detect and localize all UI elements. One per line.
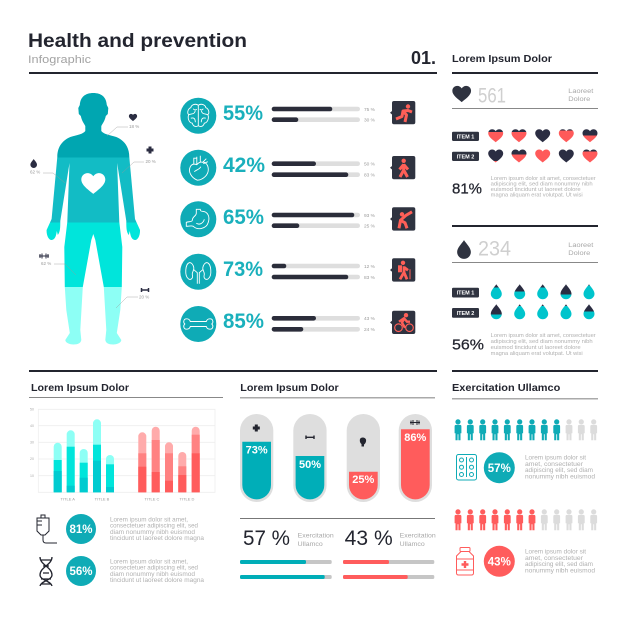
bars: 43 %	[364, 316, 376, 322]
bars: 83 %	[364, 275, 376, 281]
bars	[272, 316, 376, 333]
callout: heart 18%	[107, 114, 139, 136]
circle stat 43%: 43%	[488, 556, 511, 568]
percentage: 73%	[223, 258, 263, 281]
bar chart: TITLE D	[180, 497, 195, 502]
stat 57%: 57 %	[243, 527, 290, 550]
pictogram row: red	[455, 509, 597, 530]
text block: magna aliquam erat volutpat. Ut wisi	[491, 351, 583, 357]
callout: dumbbell 62%: 62 %	[41, 261, 51, 266]
label	[568, 242, 594, 257]
title: Health and prevention	[28, 31, 247, 52]
icon: runner	[390, 101, 415, 124]
bar chart: TITLE B	[95, 497, 110, 502]
icon: heart	[452, 86, 471, 102]
bar chart: 50	[30, 408, 34, 412]
cyan bars	[54, 419, 114, 492]
text block: tincidunt ut laoreet dolore magna	[110, 535, 205, 542]
callout: small dumbbell 20%: 20 %	[139, 294, 149, 300]
gauge 73%: 73%	[246, 444, 268, 456]
icon: IV bag	[37, 515, 57, 543]
text block: adipiscing elit, sed diam nonummy nibh	[491, 339, 593, 345]
text block: Lorem ipsum dolor sit amet, consectetuer	[491, 176, 596, 182]
callout: plus 20%: 20 %	[146, 159, 156, 164]
percentage: 85%	[223, 310, 264, 333]
bars: 12 %	[364, 264, 376, 270]
pictogram row: teal	[455, 419, 597, 440]
panel: heart stats	[452, 53, 598, 199]
heading: Exercitation Ullamco	[452, 382, 560, 394]
bars: 30 %	[364, 118, 376, 124]
circle stat 57%	[484, 452, 515, 483]
bars: 83 %	[364, 172, 376, 178]
icon: stomach	[180, 201, 216, 237]
row: heart 42%	[180, 150, 415, 186]
icon: brain	[180, 98, 216, 134]
text block: Lorem ipsum dolor sit amet,	[110, 516, 188, 524]
text block: tincidunt ut laoreet dolore magna	[110, 577, 205, 584]
item badges	[452, 288, 479, 318]
panel: bar chart section	[29, 382, 223, 586]
circle stat 81%	[66, 514, 96, 544]
text block: adipiscing elit, sed diam	[525, 561, 593, 568]
callout: drop 62%	[30, 159, 65, 183]
subtitle: Infographic	[28, 54, 92, 66]
gauge 86%: 86%	[404, 432, 427, 444]
stat 43%: 43 %	[345, 527, 393, 550]
heading: Lorem Ipsum Dolor	[240, 382, 339, 394]
panel: people pictograms	[452, 382, 598, 577]
big number: 561	[478, 84, 506, 107]
text block: Lorem ipsum dolor sit amet, consectetuer	[491, 333, 596, 339]
bars: 25 %	[364, 224, 376, 230]
stat 57%: Exercitation	[298, 532, 334, 540]
drops grid	[491, 284, 594, 319]
item badges	[452, 132, 479, 161]
percentage: 55%	[223, 102, 263, 125]
gauge 86%	[399, 414, 432, 502]
heading: Lorem Ipsum Dolor	[31, 382, 129, 394]
bar chart: 30	[30, 440, 34, 444]
text block: euismod tincidunt ut laoreet dolore	[491, 345, 581, 351]
text block: consectetuer adipiscing elit, sed	[110, 565, 198, 572]
row: kidneys 73%	[180, 254, 415, 290]
callout: heart 18%: 18 %	[129, 124, 139, 129]
text block: diam nonummy nibh euismod	[110, 529, 196, 536]
label: Dolore	[568, 96, 591, 103]
stat 43%: Exercitation	[400, 532, 436, 540]
bar chart	[30, 408, 215, 502]
callout: dumbbell 62%	[39, 254, 76, 275]
bar chart: 10	[30, 474, 34, 478]
label	[568, 88, 594, 103]
text block	[110, 558, 205, 584]
text block	[491, 333, 596, 357]
big number: 234	[478, 238, 511, 261]
callout: plus 20%	[122, 146, 156, 173]
panel: pill gauges	[240, 382, 436, 579]
icon: pills blister	[456, 454, 476, 480]
row: bone 85%	[180, 306, 415, 342]
icon: hiker	[390, 258, 415, 282]
panel: drop stats	[452, 225, 598, 357]
circle stat 81%: 81%	[69, 524, 93, 536]
icon: cyclist	[390, 311, 415, 334]
bars: 93 %	[364, 213, 376, 219]
bar chart: 40	[30, 424, 34, 428]
icon: drop	[457, 240, 471, 259]
text block: amet, consectetuer	[525, 555, 583, 562]
text block: magna aliquam erat volutpat. Ut wisi	[491, 193, 583, 199]
section number: 01.	[411, 48, 436, 68]
text block	[525, 454, 596, 480]
hearts grid	[488, 129, 598, 162]
bar chart: TITLE C	[145, 497, 160, 502]
icon: walker	[390, 156, 415, 179]
text block: nonummy nibh euismod	[525, 474, 596, 480]
label: Dolore	[568, 250, 591, 257]
gauge 73%	[240, 414, 273, 502]
item badges: ITEM 2	[457, 154, 474, 160]
item badges: ITEM 1	[457, 291, 474, 297]
gauge 25%: 25%	[352, 474, 375, 486]
red progress bars	[343, 560, 434, 579]
text block: adipiscing elit, sed diam	[525, 467, 593, 474]
bars	[272, 264, 376, 281]
bar chart: 20	[30, 457, 34, 461]
icon: white heart on chest	[81, 173, 105, 194]
text block: Lorem ipsum dolor sit	[525, 454, 586, 462]
stat: 56%	[452, 336, 484, 353]
text block: adipiscing elit, sed diam nonummy nibh	[491, 182, 593, 188]
circle stat 57%: 57%	[488, 463, 511, 475]
label: Laoreet	[568, 242, 594, 249]
text block: Lorem ipsum dolor sit	[525, 548, 586, 556]
icon: bone	[180, 306, 216, 342]
text block: Lorem ipsum dolor sit amet,	[110, 558, 188, 566]
bars	[272, 107, 376, 124]
callout: small dumbbell 20%	[116, 288, 149, 308]
text block: euismod tincidunt ut laoreet dolore	[491, 187, 581, 193]
percentage: 42%	[223, 154, 265, 177]
bars: 50 %	[364, 162, 376, 168]
bars	[272, 161, 376, 178]
red bars	[138, 427, 200, 492]
item badges: ITEM 2	[457, 311, 474, 317]
row: stomach 65%	[180, 201, 415, 237]
circle stat 43%	[484, 546, 515, 577]
icon: medicine bottle	[456, 548, 474, 575]
text block	[110, 516, 205, 542]
bar chart: TITLE A	[60, 497, 75, 502]
bars: 75 %	[364, 107, 376, 113]
circle stat 56%: 56%	[69, 566, 93, 578]
gauge 25%	[347, 414, 380, 502]
text block: amet, consectetuer	[525, 461, 583, 468]
bars	[272, 213, 376, 230]
label: Laoreet	[568, 88, 594, 95]
stat 57%	[243, 527, 334, 550]
text block: diam nonummy nibh euismod	[110, 571, 196, 578]
gauge 50%: 50%	[299, 459, 321, 471]
text block	[525, 548, 596, 574]
icon: stretching figure	[390, 207, 415, 231]
item badges: ITEM 1	[457, 134, 474, 140]
icon: anatomical heart	[180, 150, 216, 186]
text block: consectetuer adipiscing elit, sed	[110, 523, 198, 530]
stat: 81%	[452, 180, 482, 197]
stat 57%: Ullamco	[298, 541, 323, 548]
stat 43%	[345, 527, 436, 550]
text block: nonummy nibh euismod	[525, 568, 596, 574]
bars: 24 %	[364, 327, 376, 333]
icon: kidneys	[180, 254, 216, 290]
circle stat 56%	[66, 556, 96, 586]
heading: Lorem Ipsum Dolor	[452, 53, 552, 65]
gauge 50%	[293, 414, 327, 502]
callout: drop 62%: 62 %	[30, 170, 40, 174]
text block	[491, 176, 596, 199]
body figure	[46, 93, 140, 344]
icon: DNA	[40, 557, 52, 586]
row: brain 55%	[180, 98, 415, 134]
stat 43%: Ullamco	[400, 541, 425, 548]
teal progress bars	[240, 560, 332, 579]
percentage: 65%	[223, 206, 264, 229]
